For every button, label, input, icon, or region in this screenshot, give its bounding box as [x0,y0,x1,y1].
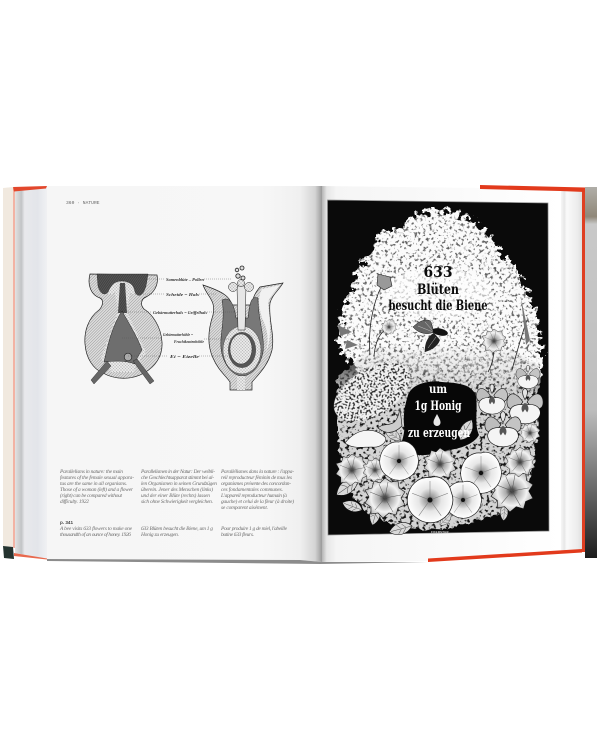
style [237,286,246,330]
caption: English, parallelisms: features of the female sexual appara- [60,474,134,481]
panel: left page [47,186,322,562]
illustration labels with leader lines [122,277,238,359]
caption: German, parallelisms: che Geschlechtsapparat stimmt bei al- [141,475,214,481]
left cover red bottom [14,553,47,560]
book bottom shadow [47,559,428,564]
book: right cover and fore edge [560,187,597,558]
left cover cream edge [3,187,13,547]
caption: French, bee: butine 633 fleurs. [221,531,254,538]
caption: English, parallelisms: difficulty. 1922 [60,498,89,505]
illustration labels with leader lines: Ei = Eizelle [169,354,199,359]
caption: German, parallelisms: überein. Jener des Menschen (links) [141,486,213,493]
inner stippled wall [101,282,146,372]
frilled petunias [491,470,533,512]
book: left cover and fore edge [3,186,47,560]
blossom cloud [338,210,542,400]
caption: German, bee: 633 Blüten besucht die Biene, um 1 g [141,526,213,532]
black centre behind lower text [401,382,479,455]
clear area behind headline [384,268,492,318]
ovary cavity [228,332,256,368]
stem core [237,376,245,390]
wildflower stems and blooms [338,274,530,372]
dark upper band [97,274,148,295]
ovum [124,353,132,361]
right page stack [560,190,582,553]
slogan [408,381,470,441]
headline: besucht die Biene [388,298,488,314]
poster black ground [328,200,549,535]
daisy [482,329,506,353]
small blossom [381,319,397,335]
slogan: 1g Honig [414,399,462,414]
ovary [230,334,252,364]
caption: English, parallelisms: tus are the same in all organisms. [60,481,127,487]
caption: French, bee: Pour produire 1 g de miel, l'abeille [220,526,288,532]
caption: English, parallelisms: Those of a woman (left) and a flower [60,486,134,493]
caption: German, bee: Honig zu erzeugen. [140,532,179,538]
lower flower cluster [333,365,543,536]
running header: 360 · NATURE [66,200,100,206]
page reference: p. 341 [60,520,73,525]
slogan: zu erzeugen [408,426,470,441]
right tube [133,359,154,384]
illustration: flower cross-section [203,266,283,390]
right cover red top edge [480,185,585,192]
caption: French, parallelisms: Parallélismes dans la nature : l'appa- [220,469,294,475]
pansies [516,365,540,389]
caption: German, parallelisms: und der einer Blüte (rechts) lassen [141,492,210,499]
uterine cavity [104,311,142,364]
right cover red fore edge [582,188,585,552]
right cover red bottom edge [428,549,582,562]
leaves [333,475,362,499]
caption: French, parallelisms: reil reproducteur féminin de tous les [221,474,292,481]
illustration labels with leader lines: Samenblüte – Pollen [166,277,204,282]
side grass [338,298,530,349]
caption: English, parallelisms: (right) can be compared without [60,492,122,499]
white lily petals [345,430,386,447]
caption: French, parallelisms: ces fondamentales communes. [221,486,283,493]
poppy [377,274,392,290]
illustration labels with leader lines: Fruchtknotenhöhle [174,339,204,344]
white petal highlight [259,285,280,352]
caption: German, parallelisms: sich ohne Schwierigkeit vergleichen. [141,499,213,505]
icon: honey drop [434,414,440,426]
caption: French, parallelisms: L'appareil reproducteur humain (à [220,492,287,499]
illustration labels with leader lines: Scheide = Hals [166,292,199,297]
caption: French, parallelisms: se comparent aisément. [221,505,268,511]
pollen grains [235,266,245,280]
stigma lobes [228,280,254,292]
headline [388,263,488,314]
left page stack [15,188,47,559]
left cover dark corner [3,546,14,559]
caption: English, parallelisms: Parallelisms in nature: the main [59,469,123,475]
poster: 633 Blüten [324,200,549,536]
caption: French, parallelisms: gauche) et celui de la fleur (à droite) [221,498,294,505]
cervical canal [118,283,127,313]
caption: French, parallelisms: organismes présente des concordan- [221,481,291,487]
flower outline [203,283,283,390]
backdrop strip at the far right [585,187,597,558]
caption: English, bee: A bee visits 633 flowers to make one [59,525,133,532]
lilac cluster [324,351,420,433]
headline: 633 [424,263,452,281]
caption: English, bee: thousandth of an ounce of honey. 1926 [60,531,131,538]
poster signature: FOERSTER [431,530,449,534]
bee [413,320,449,352]
small round flower [520,423,540,443]
illustration: female reproductive anatomy [85,274,162,384]
panel: right page [322,185,585,562]
left cover pale red spine edge [13,188,15,548]
headline: Blüten [417,282,459,298]
left tube [91,361,111,384]
body outline [85,274,162,378]
illustration labels with leader lines: Gebärmutterhals = Griffelhals [153,310,207,315]
open petunias [380,441,418,480]
inner dark chamber [221,298,263,376]
slogan: um [429,381,447,396]
illustration labels with leader lines: Gebärmutterhöhle = [163,332,193,337]
left cover red top edge [13,186,47,192]
caption: German, parallelisms: Parallelismen in der Natur: Der weibli- [140,469,215,475]
floral wreath mass [338,345,540,530]
stippled ring [223,326,261,374]
caption: German, parallelisms: len Organismen in seinen Grundzügen [141,481,217,487]
